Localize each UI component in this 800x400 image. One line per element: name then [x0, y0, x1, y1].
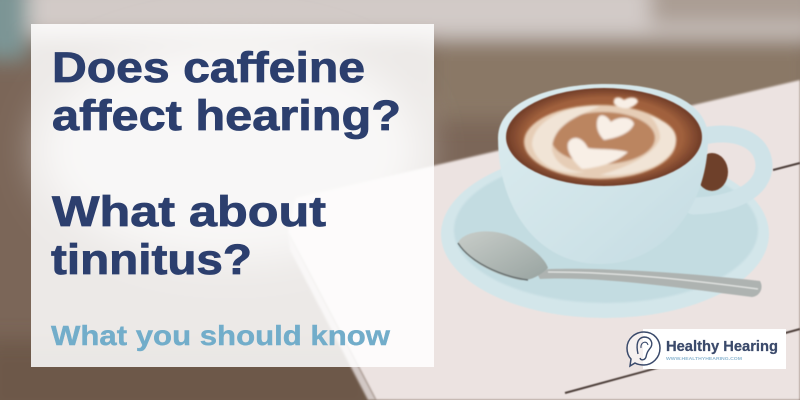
heading: caffeine question: Does caffeine [52, 44, 365, 92]
logo url: WWW.HEALTHYHEARING.COM [666, 356, 743, 361]
heading: caffeine question [52, 44, 401, 140]
saucer [441, 150, 769, 318]
white table [288, 80, 800, 400]
heading: tinnitus question [51, 188, 326, 284]
spoon [458, 231, 762, 297]
logo wordmark: Healthy Hearing [666, 338, 778, 355]
heading: tinnitus question: tinnitus? [51, 236, 252, 284]
cup body [498, 84, 708, 264]
cookie behind handle [696, 153, 728, 191]
logo: Healthy Hearing [627, 329, 786, 369]
translucent text panel [31, 24, 434, 367]
latte art [524, 97, 676, 179]
icon: ear in speech bubble [627, 332, 660, 366]
heading: caffeine question: affect hearing? [52, 92, 401, 140]
coffee surface [506, 88, 702, 186]
coffee cup and saucer [441, 84, 769, 318]
cup handle [693, 134, 764, 206]
logo background [643, 329, 786, 369]
subheading: What you should know [51, 320, 390, 351]
heading: tinnitus question: What about [52, 188, 326, 236]
